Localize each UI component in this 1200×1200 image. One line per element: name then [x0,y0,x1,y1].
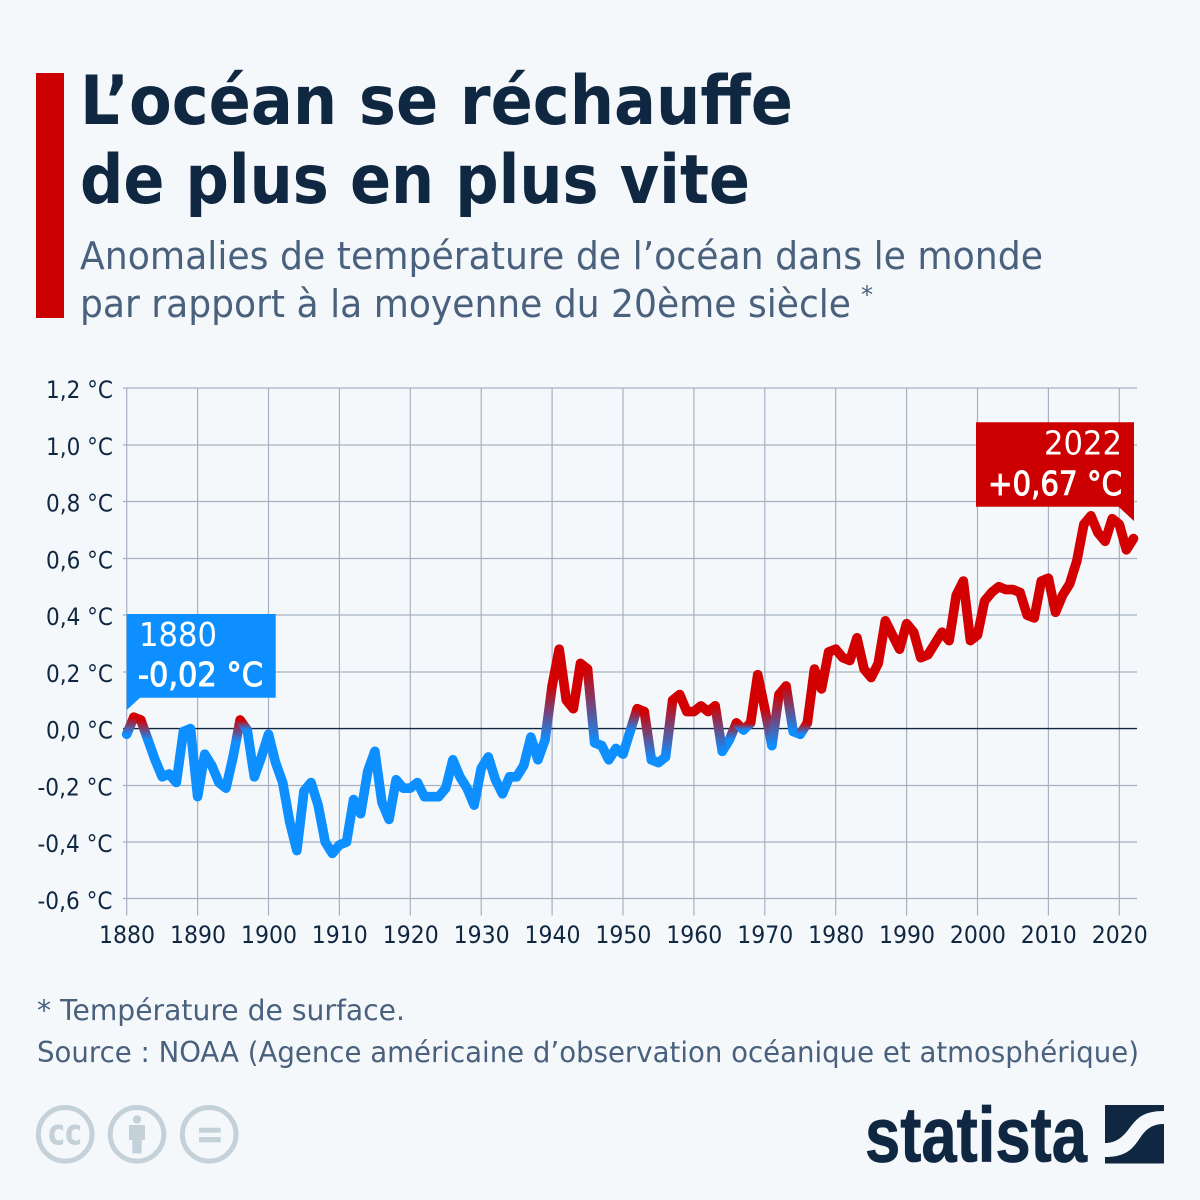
x axis labels: 1970 [737,921,793,949]
x axis labels: 2010 [1021,921,1077,949]
icon: attribution [110,1108,164,1161]
red accent bar [36,73,64,318]
x axis labels: 1950 [595,921,651,949]
chart gridlines [123,388,1137,916]
x axis labels: 1880 [99,921,155,949]
y axis labels: 1,2 °C [46,376,113,404]
x axis labels: 1900 [241,921,297,949]
y axis labels: 0,6 °C [46,546,113,574]
y axis labels: -0,6 °C [38,887,112,915]
title: de plus en plus vite [80,141,750,220]
y axis labels: 0,2 °C [46,660,113,688]
callout: 2022 [976,422,1134,521]
icon: creative commons [38,1108,92,1161]
x axis labels: 1940 [524,921,580,949]
y axis labels [38,376,113,915]
x axis labels: 1960 [666,921,722,949]
x axis labels: 1910 [312,921,368,949]
y axis labels: -0,2 °C [38,774,112,802]
x axis labels: 1980 [808,921,864,949]
icon: creative commons: cc [48,1112,82,1154]
zero baseline [123,728,1137,730]
y axis labels: 0,4 °C [46,603,113,631]
x axis labels: 2020 [1092,921,1148,949]
x axis labels: 1920 [383,921,439,949]
footnote: * Température de surface. [37,994,405,1027]
subtitle: par rapport à la moyenne du 20ème siècle [80,282,851,326]
statista logo mark [1105,1105,1164,1164]
callout: 2022: +0,67 °C [988,464,1122,503]
x axis labels: 1890 [170,921,226,949]
x axis labels: 2000 [950,921,1006,949]
y axis labels: 0,8 °C [46,490,113,518]
callout: 1880 [127,614,276,710]
subtitle: * [861,281,873,309]
title: L’océan se réchauffe [80,62,793,141]
y axis labels: 0,0 °C [46,716,113,744]
callout: 1880: 1880 [139,615,217,654]
subtitle: Anomalies de température de l’océan dans le monde [80,234,1043,278]
statista wordmark: statista [865,1090,1087,1178]
callout: 1880: -0,02 °C [138,655,263,694]
y axis labels: 1,0 °C [46,433,113,461]
subtitle [80,234,1043,326]
y axis labels: -0,4 °C [38,830,112,858]
title [80,62,793,220]
x axis labels [99,921,1148,949]
icon: no derivatives [182,1108,236,1161]
callout: 2022: 2022 [1044,424,1122,462]
x axis labels: 1930 [454,921,510,949]
temperature anomaly line [127,516,1133,853]
source: Source : NOAA (Agence américaine d’observation océanique et atmosphérique) [37,1036,1139,1069]
x axis labels: 1990 [879,921,935,949]
